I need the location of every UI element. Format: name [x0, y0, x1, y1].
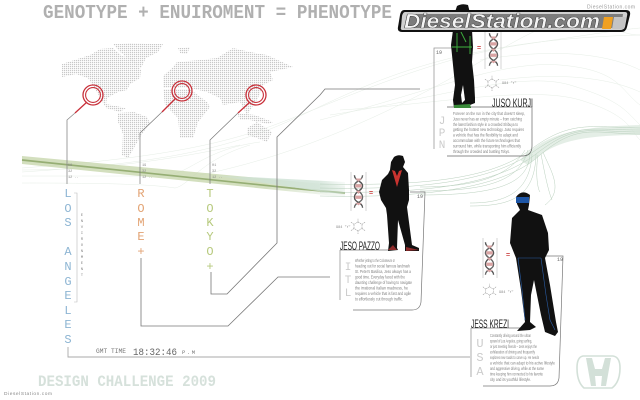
icon: Honda logo — [577, 356, 620, 388]
panel: Jeso Pazzo: JESO PAZZO — [340, 239, 380, 253]
tiny coordinates — [68, 164, 223, 180]
location marker: Los Angeles — [83, 85, 103, 105]
city label: Rome: O — [137, 202, 145, 216]
dotted world map — [62, 43, 293, 158]
connector: Rome to Jeso — [141, 258, 330, 326]
panel: Jess Krezi: = — [506, 252, 510, 259]
panel: Juso Kurji: through the crowded and bustling Tokyo. — [453, 149, 510, 154]
panel: Jess Krezi: 19 — [557, 257, 563, 263]
panel: Juso Kurji: accommodate with the future technologies that — [453, 138, 521, 143]
city label: Los Angeles — [64, 187, 72, 347]
panel: Juso Kurji: 19 — [436, 50, 442, 56]
panel: Jeso Pazzo: heading out for social famous landmark — [355, 264, 410, 268]
city label: Los Angeles: N — [64, 260, 72, 274]
panel: Juso Kurji: Forever on the run in the city that doesn't sleep, — [453, 111, 525, 116]
panel: Juso Kurji: = — [477, 45, 481, 52]
faint flow lines — [22, 19, 640, 188]
city label: Tokyo: Y — [206, 230, 214, 244]
city label: Tokyo — [206, 187, 214, 274]
tiny coordinates: 12 .. — [142, 176, 153, 180]
panel: Juso Kurji: P — [439, 128, 446, 140]
panel: Jess Krezi — [471, 192, 563, 386]
panel: Juso Kurji: a vehicle that has the flexibility to adapt and — [453, 133, 518, 138]
environment bracket — [74, 193, 84, 302]
environment bracket: V — [81, 226, 84, 230]
city label: Los Angeles: L — [64, 187, 72, 201]
panel: Jess Krezi: exhilaration of driving and frequently — [490, 350, 535, 354]
panel: Jess Krezi: time keeping him connected to his favorite — [490, 372, 543, 376]
environment bracket: E — [81, 262, 84, 266]
panel: Jess Krezi: U — [476, 337, 484, 351]
city label: Los Angeles: S — [64, 216, 72, 230]
environment bracket: N — [81, 268, 84, 272]
panel: Jeso Pazzo: St. Peter's Basilica, Jeso always has a — [355, 269, 411, 274]
logo: DieselStation.com: DieselStation.com — [404, 11, 600, 33]
city label: Tokyo: K — [206, 216, 214, 230]
panel: Juso Kurji: 984 °Y° — [502, 81, 517, 86]
panel: Jeso Pazzo: T — [345, 275, 352, 287]
gmt clock: P.M — [182, 349, 195, 356]
panel: Jeso Pazzo: daunting challenge of having to navigate — [355, 280, 412, 285]
city label: Rome — [137, 187, 145, 259]
city label: Los Angeles: A — [64, 245, 72, 259]
environment bracket: I — [81, 232, 83, 236]
city label: Rome: M — [137, 216, 145, 230]
panel: Jess Krezi: Constantly driving around the urban — [490, 333, 531, 338]
gmt clock: GMT TIME — [96, 348, 126, 355]
connector: Los Angeles to Jess — [68, 347, 470, 357]
city label: Los Angeles: O — [64, 202, 72, 216]
panel: Juso Kurji: getting the hottest new technology. Juso requires — [453, 127, 524, 132]
panel: Juso Kurji: the latest fashion style in a crowded Shibuya to — [453, 122, 518, 127]
city label: Tokyo: O — [206, 245, 214, 259]
location marker: Rome — [172, 81, 192, 101]
tiny coordinates: 19 — [142, 164, 146, 168]
panel: Juso Kurji: JUSO KURJI — [492, 96, 533, 110]
panel: Jeso Pazzo — [336, 155, 425, 310]
city label: Los Angeles: E — [64, 318, 72, 332]
city label: Rome: R — [137, 187, 145, 201]
tiny coordinates: 01 — [212, 164, 216, 168]
panel: Jeso Pazzo: L — [345, 288, 351, 300]
panel: Jess Krezi: S — [476, 351, 484, 365]
tiny coordinates: 12 .. — [68, 176, 79, 180]
panel: Juso Kurji: N — [439, 140, 445, 152]
panel: Juso Kurji: J — [439, 116, 445, 128]
environment bracket: O — [81, 244, 84, 248]
panel: Jeso Pazzo: 984 °Y° — [336, 225, 351, 230]
panel: Jess Krezi: a vehicle that can adapt to his active lifestyle — [490, 360, 555, 366]
silhouette: Juso — [451, 4, 475, 108]
credit bottom: DieselStation.com — [4, 391, 52, 397]
title: GENOTYPE + ENUIROMENT = PHENOTYPE — [43, 2, 392, 24]
design challenge heading: DESIGN CHALLENGE 2009 — [38, 373, 216, 391]
panel: Jess Krezi: 984 °Y° — [499, 290, 514, 295]
city label: Tokyo: + — [206, 260, 214, 274]
environment bracket: R — [81, 238, 84, 242]
panel: Jeso Pazzo: to effortlessly cut through traffic. — [355, 296, 403, 302]
panel: Jess Krezi: or just meeting friends – Jess enjoys the — [490, 344, 537, 349]
environment bracket: T — [81, 274, 84, 278]
tiny coordinates: 58 — [68, 164, 72, 168]
silhouette: Jeso — [379, 155, 419, 251]
panel: Jeso Pazzo: = — [369, 190, 373, 197]
silhouette: Jess — [510, 192, 558, 336]
credit top: DieselStation.com — [587, 4, 635, 10]
city label: Los Angeles: G — [64, 275, 72, 289]
tiny coordinates: 32 — [212, 170, 216, 174]
environment bracket: E — [81, 214, 84, 218]
panel: Jeso Pazzo: 19 — [417, 194, 423, 200]
city label: Los Angeles: E — [64, 289, 72, 303]
environment bracket: N — [81, 250, 84, 254]
panel: Jess Krezi: and aggressive driving, while at the same — [490, 366, 544, 371]
panel: Juso Kurji: Juso never has an empty minute – from catching — [453, 116, 522, 121]
panel: Jess Krezi: explores new roads to carve up. He needs — [490, 355, 539, 360]
panel: Jeso Pazzo: requires a vehicle that is fast and agile — [355, 291, 411, 296]
city label: Los Angeles: L — [64, 304, 72, 318]
panel: Jess Krezi: JESS KREZI — [471, 317, 509, 331]
city label: Tokyo: T — [206, 187, 214, 201]
tiny coordinates: 32 — [68, 170, 72, 174]
marker lines — [67, 98, 250, 184]
environment bracket: N — [81, 220, 84, 224]
location marker: Tokyo — [246, 85, 266, 105]
city label: Tokyo: O — [206, 202, 214, 216]
panel: Jess Krezi: A — [476, 365, 484, 379]
city label: Los Angeles: S — [64, 333, 72, 347]
tiny coordinates: 32 — [142, 170, 146, 174]
panel: Jeso Pazzo: good time. Everyday faced with the — [355, 274, 405, 280]
connector: Tokyo to Juso — [211, 89, 420, 294]
panel: Juso Kurji: surround him, while transporting him efficiently — [453, 143, 522, 148]
panel: Juso Kurji — [434, 4, 533, 156]
panel: Jeso Pazzo: Whether jetting to the Colosseum or — [355, 258, 395, 263]
panel: Jeso Pazzo: I — [345, 262, 351, 274]
gmt clock — [96, 348, 195, 359]
gmt clock: 18:32:46 — [133, 348, 177, 359]
panel: Jess Krezi: city and its youthful lifestyle. — [490, 377, 531, 382]
flowing ribbon — [22, 125, 640, 206]
city label: Rome: E — [137, 230, 145, 244]
panel: Jess Krezi: sprawl of Los Angeles, going surfing, — [490, 338, 532, 344]
environment bracket: M — [81, 256, 84, 260]
panel: Jeso Pazzo: the irrational Italian madness, he — [355, 286, 408, 290]
tiny coordinates: 12 .. — [212, 176, 223, 180]
city label: Rome: + — [137, 245, 145, 259]
